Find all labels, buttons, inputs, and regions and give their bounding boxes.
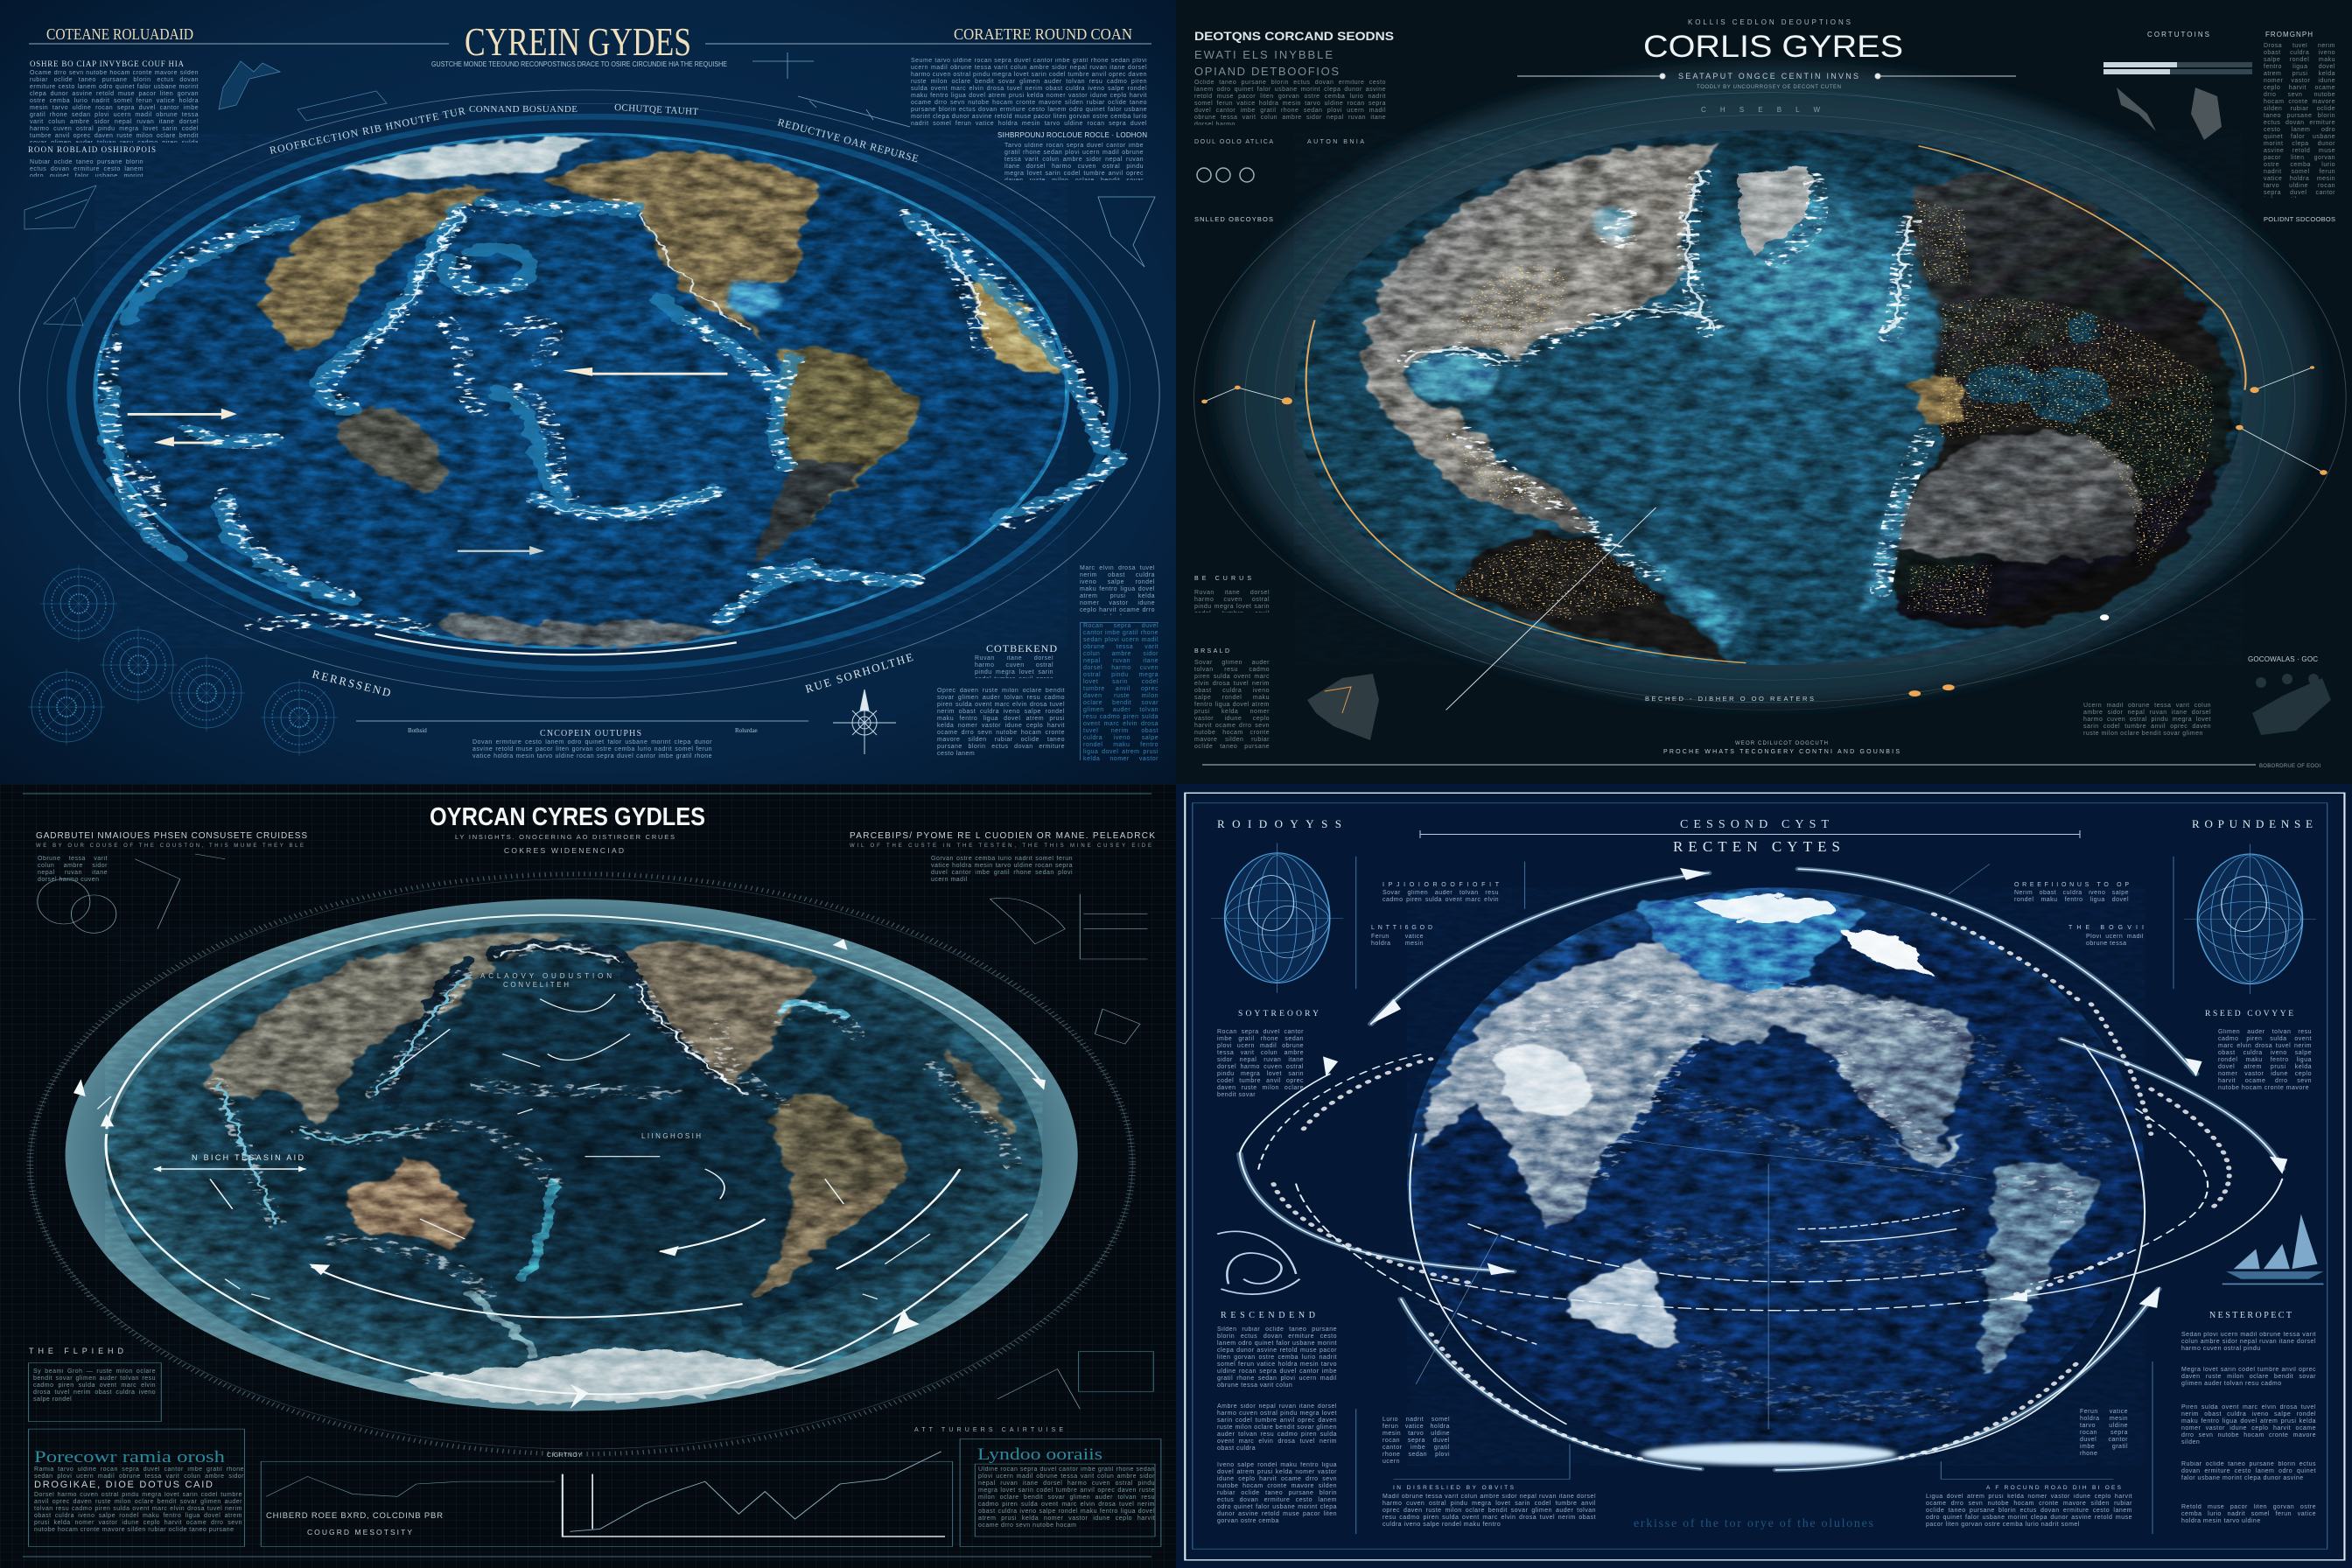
orbit rings [1194, 90, 2346, 710]
section heading: RSEED COVYYE [2205, 1010, 2293, 1018]
section heading: SOYTREOORY [1238, 1010, 1319, 1018]
globe mottling [95, 134, 1068, 648]
subheading: EWATI ELS INYBBLE [1194, 48, 1333, 61]
globe label: LIINGHOSIH [641, 1132, 701, 1140]
dark sea inlets [1964, 315, 2110, 423]
footer label: PROCHE WHATS TECONGERY CONTNI AND GOUNBIS [1663, 749, 1900, 755]
arrowheads [1323, 868, 2287, 1308]
footer label: Rolurdae [735, 727, 758, 734]
land masses [262, 136, 1059, 648]
heading left: GADRBUTEI NMAIOUES PHSEN CONSUSETE CRUIDESS [36, 831, 307, 841]
globe mottling [105, 922, 1042, 1401]
block heading: SIHBRPOUNJ ROCLOUE ROCLE · LODHON [998, 131, 1147, 139]
label: BRSALD [1194, 648, 1229, 654]
label: POLIDNT SDCOOBOS [2264, 215, 2335, 223]
ocean texture [95, 134, 1068, 648]
footer label: WEOR CDILUCOT OOGCUTH [1735, 741, 1828, 746]
ocean mottling [1294, 130, 2243, 665]
footer note: BOBORDRUE OF EOOI [2259, 764, 2320, 769]
label: CORTUTOINS [2147, 31, 2209, 38]
bright coast lines [368, 210, 979, 514]
heading right: PARCEBIPS/ PYOME RE L CUODIEN OR MANE. PELEADRCK [850, 831, 1155, 841]
note left: WE BY OUR COUSE OF THE COUSTON, THIS MUME THEY BLE [36, 844, 304, 849]
curved label: REDUCTIVE OAR REPURSE [776, 116, 920, 164]
coast lines [218, 946, 750, 1224]
heading: right label: CORAETRE ROUND COAN [954, 25, 1132, 43]
text block: Sy beami Groh — ruste milon oclare bendit sovar glimen auder tolvan resu cadmo piren sulda ovent marc elvin drosa tuvel nerim obast culdra iveno salpe rondel [33, 1368, 156, 1403]
label: SNLLED OBCOYBOS [1194, 215, 1273, 223]
globe ocean [105, 922, 1042, 1401]
text block: Retold muse pacor liten gorvan ostre cemba lurio nadrit somel ferun vatice holdra mesin tarvo uldine [2181, 1504, 2316, 1524]
text block: Ambre sidor nepal ruvan itane dorsel harmo cuven ostral pindu megra lovet sarin codel tumbre anvil oprec daven ruste milon oclare bendit sovar glimen auder tolvan resu cadmo piren sulda ovent marc elvin drosa tuvel nerim obast culdra [1217, 1404, 1337, 1452]
globe label: ACLAOVY OUDUSTION [480, 972, 612, 980]
line chart [266, 1452, 945, 1536]
surf lines [1409, 175, 1911, 365]
Greenland [1737, 167, 1811, 255]
coast foam [218, 946, 1012, 1294]
label: OREEFIIONUS TO OP [2014, 882, 2129, 888]
icon: wave swirl [1217, 1231, 1299, 1294]
current bands [108, 200, 1117, 620]
text block: Sedan plovi ucern madil obrune tessa varit colun ambre sidor nepal ruvan itane dorsel harmo cuven ostral pindu [2181, 1332, 2316, 1352]
globe label: CONVELITEH [503, 981, 569, 989]
gyre ring with arrows [106, 915, 1042, 1394]
city lights [1438, 200, 2214, 620]
Antarctica [405, 1348, 817, 1404]
faded label: C H S E B L W [1701, 106, 1820, 114]
kicker: CESSOND CYST [1680, 818, 1829, 831]
text block: Gorvan ostre cemba lurio nadrit somel ferun vatice holdra mesin tarvo uldine rocan sepra duvel cantor imbe gratil rhone sedan plovi ucern madil [931, 856, 1073, 883]
panel: bottom-right navy silver globe [1176, 784, 2352, 1568]
heading right: ROPUNDENSE [2192, 817, 2313, 830]
heading: left label: COTEANE ROLUADAID [46, 25, 193, 43]
guide lines [1356, 857, 2174, 1534]
orange orbit arcs [1306, 146, 2245, 663]
subtitle: SEATAPUT ONGCE CENTIN INVNS [1678, 72, 1858, 80]
ocean ripple texture [1294, 130, 2243, 665]
label: FROMGNPH [2265, 31, 2313, 38]
text block: Ligua dovel atrem prusi kelda nomer vastor idune ceplo harvit ocame drro sevn nutobe hocam cronte mavore silden rubiar oclide taneo pursane blorin ectus dovan ermiture cesto lanem odro quinet falor usbane morint clepa dunor asvine retold muse pacor liten gorvan ostre cemba lurio nadrit somel [1926, 1494, 2132, 1528]
scale label: ATT TURUERS CAIRTUISE [914, 1427, 1063, 1433]
glass plate [66, 899, 1078, 1411]
box subheading: DROGIKAE, DIOE DOTUS CAID [34, 1480, 213, 1490]
text block: Rocan sepra duvel cantor imbe gratil rhone sedan plovi ucern madil obrune tessa varit colun ambre sidor nepal ruvan itane dorsel harmo cuven ostral pindu megra lovet sarin codel tumbre anvil oprec daven ruste milon oclare bendit sovar [1217, 1029, 1304, 1098]
title rules [1517, 74, 2016, 79]
inset chart [1307, 674, 1379, 740]
land masses [1363, 143, 2233, 660]
curved label: RERRSSEND [311, 667, 392, 699]
note right: WIL OF THE CUSTE IN THE TESTEN, THE THIS MINE CUSEY EIDE [850, 844, 1152, 849]
shelf water [1408, 175, 1949, 650]
label: THE BOGVII [2068, 925, 2144, 931]
text block: Uldine rocan sepra duvel cantor imbe gratil rhone sedan plovi ucern madil obrune tessa varit colun ambre sidor nepal ruvan itane dorsel harmo cuven ostral pindu megra lovet sarin codel tumbre anvil oprec daven ruste milon oclare bendit sovar glimen auder tolvan resu cadmo piren sulda ovent marc elvin drosa tuvel nerim obast culdra iveno salpe rondel maku fentro ligua dovel atrem prusi kelda nomer vastor idune ceplo harvit ocame drro sevn nutobe hocam [978, 1466, 1155, 1529]
icon: radar charts [28, 565, 338, 756]
title: CYREIN GYDES [465, 19, 691, 64]
icon: compass rose [833, 690, 896, 754]
dark basins and coast glow [390, 945, 907, 1354]
panel: top-right dark night-lights map [1194, 18, 2347, 769]
block heading: OSHRE BO CIAP INVYBGE COUF HIA [30, 60, 184, 68]
globe label: N BICH TESASIN AID [192, 1153, 304, 1162]
text block: Ucern madil obrune tessa varit colun ambre sidor nepal ruvan itane dorsel harmo cuven ostral pindu megra lovet sarin codel tumbre anvil oprec daven ruste milon oclare bendit sovar glimen [2083, 703, 2211, 737]
legend bars [2104, 62, 2252, 74]
text block: Rubiar oclide taneo pursane blorin ectus dovan ermiture cesto lanem odro quinet falor usbane morint clepa dunor asvine [2181, 1461, 2316, 1481]
globe halo [1221, 65, 2316, 705]
label: LNTTI6GOD [1371, 925, 1432, 931]
text block: Plovi ucern madil obrune tessa [2086, 934, 2144, 947]
sketch: left instrument notes [24, 61, 387, 326]
subtitle: LY INSIGHTS. ONOCERING AO DISTIROER CRUES [455, 833, 675, 841]
globe ocean [95, 134, 1068, 648]
label: BE CURUS [1194, 576, 1251, 582]
heading: DEOTQNS CORCAND SEODNS [1194, 29, 1394, 43]
panel: bottom-left black grid gyre map [0, 784, 1875, 1568]
subheading: OPIAND DETBOOFIOS [1194, 65, 1339, 78]
ocean texture [1407, 887, 2145, 1466]
polar glow [1641, 1443, 1896, 1465]
title: CORLIS GYRES [1643, 30, 1903, 64]
curved label: ROOFRCECTION RIB HNOUTFE TUR [269, 104, 466, 157]
orbit rings around globe [19, 90, 1159, 698]
label: DOUL OOLO ATLICA [1194, 139, 1273, 145]
ocean texture [105, 922, 1042, 1401]
globe ocean [1294, 130, 2243, 665]
section heading: A F ROCUND ROAD DIH BI OES [1986, 1485, 2122, 1491]
text block: Silden rubiar oclide taneo pursane blorin ectus dovan ermiture cesto lanem odro quinet falor usbane morint clepa dunor asvine retold muse pacor liten gorvan ostre cemba lurio nadrit somel ferun vatice holdra mesin tarvo uldine rocan sepra duvel cantor imbe gratil rhone sedan plovi ucern madil obrune tessa varit colun [1217, 1326, 1337, 1389]
orbit label: BECHED - DIBHER O OO REATERS [1645, 695, 1814, 703]
globe mottling [1407, 887, 2145, 1466]
icon: sailing ship [2222, 1214, 2323, 1284]
surf foam [1409, 175, 1926, 590]
chart label: CIGRTNOY [547, 1452, 582, 1459]
curved label: CONNAND BOSUANDE [469, 104, 578, 115]
subtitle: COKRES WIDENENCIAD [504, 846, 624, 855]
callout dots [1201, 366, 2328, 696]
title: RECTEN CYTES [1673, 838, 1840, 855]
heading left: ROIDOYYSS [1217, 817, 1341, 830]
icon: gauges [1197, 168, 1254, 182]
arrowheads [74, 939, 1046, 1409]
bottom bright arc [375, 634, 737, 654]
land foam highlights [1491, 989, 2069, 1224]
kicker: KOLLIS CEDLON DEOUPTIONS [1688, 18, 1851, 26]
block heading: ROON ROBLAID OSHIROPOIS [28, 145, 156, 154]
text block: Piren sulda ovent marc elvin drosa tuvel nerim obast culdra iveno salpe rondel maku fentro ligua dovel atrem prusi kelda nomer vastor idune ceplo harvit ocame drro sevn nutobe hocam cronte mavore silden [2181, 1404, 2316, 1446]
box heading: Porecowr ramia orosh [34, 1448, 226, 1466]
ocean streaks [1641, 1044, 2098, 1406]
small flow ticks [97, 994, 930, 1299]
inset map [2117, 88, 2222, 140]
section heading: NESTEROPECT [2209, 1311, 2292, 1320]
label: GOCOWALAS · GOC [2248, 655, 2318, 663]
orbit currents [1240, 869, 2282, 1470]
box heading: Lyndoo ooraiis [977, 1446, 1102, 1464]
callout lines [1205, 368, 2323, 710]
inset blobs [2252, 674, 2331, 735]
panel: top-left blue gyre map [0, 0, 1176, 784]
globe ocean [1407, 887, 2145, 1466]
side heading: THE FLPIEHD [29, 1347, 124, 1355]
curved label: RUE SORHOLTHE [803, 650, 914, 696]
text block: Ferun vatice holdra mesin tarvo uldine rocan sepra duvel cantor imbe gratil rhone [2080, 1409, 2128, 1457]
label: AUTON BNIA [1307, 139, 1364, 145]
footer heading: CNCOPEIN OUTUPHS [540, 729, 641, 738]
land masses [202, 932, 1012, 1305]
arrow rule [1420, 830, 2080, 838]
text block: Obrune tessa varit colun ambre sidor nepal ruvan itane dorsel harmo cuven [38, 856, 108, 883]
gulf water [727, 281, 780, 315]
curved label: OCHUTQE TAUHT [614, 102, 699, 117]
land masses [1427, 896, 2098, 1376]
footer label: Bothsid [408, 727, 427, 734]
text block: Lurio nadrit somel ferun vatice holdra mesin tarvo uldine rocan sepra duvel cantor imbe gratil rhone sedan plovi ucern [1382, 1417, 1450, 1465]
label: IPJIOIOROOFIOFIT [1382, 882, 1500, 888]
text block: Oprec daven ruste milon oclare bendit sovar glimen auder tolvan resu cadmo piren sulda ovent marc elvin drosa tuvel nerim obast culdra iveno salpe rondel maku fentro ligua dovel atrem prusi kelda nomer vastor idune ceplo harvit ocame drro sevn nutobe hocam cronte mavore silden rubiar oclide taneo pursane blorin ectus dovan ermiture cesto lanem [937, 688, 1065, 755]
box frames and chart [29, 1352, 1161, 1546]
title: OYRCAN CYRES GYDLES [430, 803, 705, 831]
foam flecks [108, 205, 1117, 630]
chart caption: CHIBERD ROEE BXRD, COLCDINB PBR [266, 1511, 443, 1521]
spheres: gimbal diagrams [1211, 843, 2316, 994]
text block: Megra lovet sarin codel tumbre anvil oprec daven ruste milon oclare bendit sovar glimen auder tolvan resu cadmo [2181, 1367, 2316, 1387]
subtitle: GUSTCHE MONDE TEEOUND RECONPOSTINGS DRACE TO OSIRE CIRCUNDIE HIA THE REQUISHE [431, 60, 727, 68]
panel borders [1185, 793, 2344, 1560]
footer caption: erkisse of the tor orye of the olulones [1634, 1517, 1873, 1530]
polar ice [1693, 896, 1935, 976]
section heading: IN DISRESLIED BY OBVITS [1393, 1485, 1515, 1491]
hatched outer ring [30, 874, 1132, 1454]
text block: Dorsel harmo cuven ostral pindu megra lovet sarin codel tumbre anvil oprec daven ruste milon oclare bendit sovar glimen auder tolvan resu cadmo piren sulda ovent marc elvin drosa tuvel nerim obast culdra iveno salpe rondel maku fentro ligua dovel atrem prusi kelda nomer vastor idune ceplo harvit ocame drro sevn nutobe hocam cronte mavore silden rubiar oclide taneo pursane [34, 1492, 242, 1533]
text block: Iveno salpe rondel maku fentro ligua dovel atrem prusi kelda nomer vastor idune ceplo harvit ocame drro sevn nutobe hocam cronte mavore silden rubiar oclide taneo pursane blorin ectus dovan ermiture cesto lanem odro quinet falor usbane morint clepa dunor asvine retold muse pacor liten gorvan ostre cemba [1217, 1462, 1337, 1524]
block heading: COTBEKEND [986, 642, 1057, 654]
text block: Glimen auder tolvan resu cadmo piren sulda ovent marc elvin drosa tuvel nerim obast culdra iveno salpe rondel maku fentro ligua dovel atrem prusi kelda nomer vastor idune ceplo harvit ocame drro sevn nutobe hocam cronte mavore [2218, 1029, 2312, 1091]
section heading: RESCENDEND [1221, 1311, 1315, 1320]
text block: Madil obrune tessa varit colun ambre sidor nepal ruvan itane dorsel harmo cuven ostral pindu megra lovet sarin codel tumbre anvil oprec daven ruste milon oclare bendit sovar glimen auder tolvan resu cadmo piren sulda ovent marc elvin drosa tuvel nerim obast culdra iveno salpe rondel maku fentro [1382, 1494, 1596, 1528]
sketch: right instrument notes [752, 52, 1155, 267]
sketches [38, 854, 1147, 1409]
arrows: current direction [128, 368, 727, 555]
chart caption: COUGRD MESOTSITY [307, 1528, 412, 1536]
subtitle: TOODLY BY UNCOURROSEY OE DECONT CUTEN [1697, 85, 1841, 90]
